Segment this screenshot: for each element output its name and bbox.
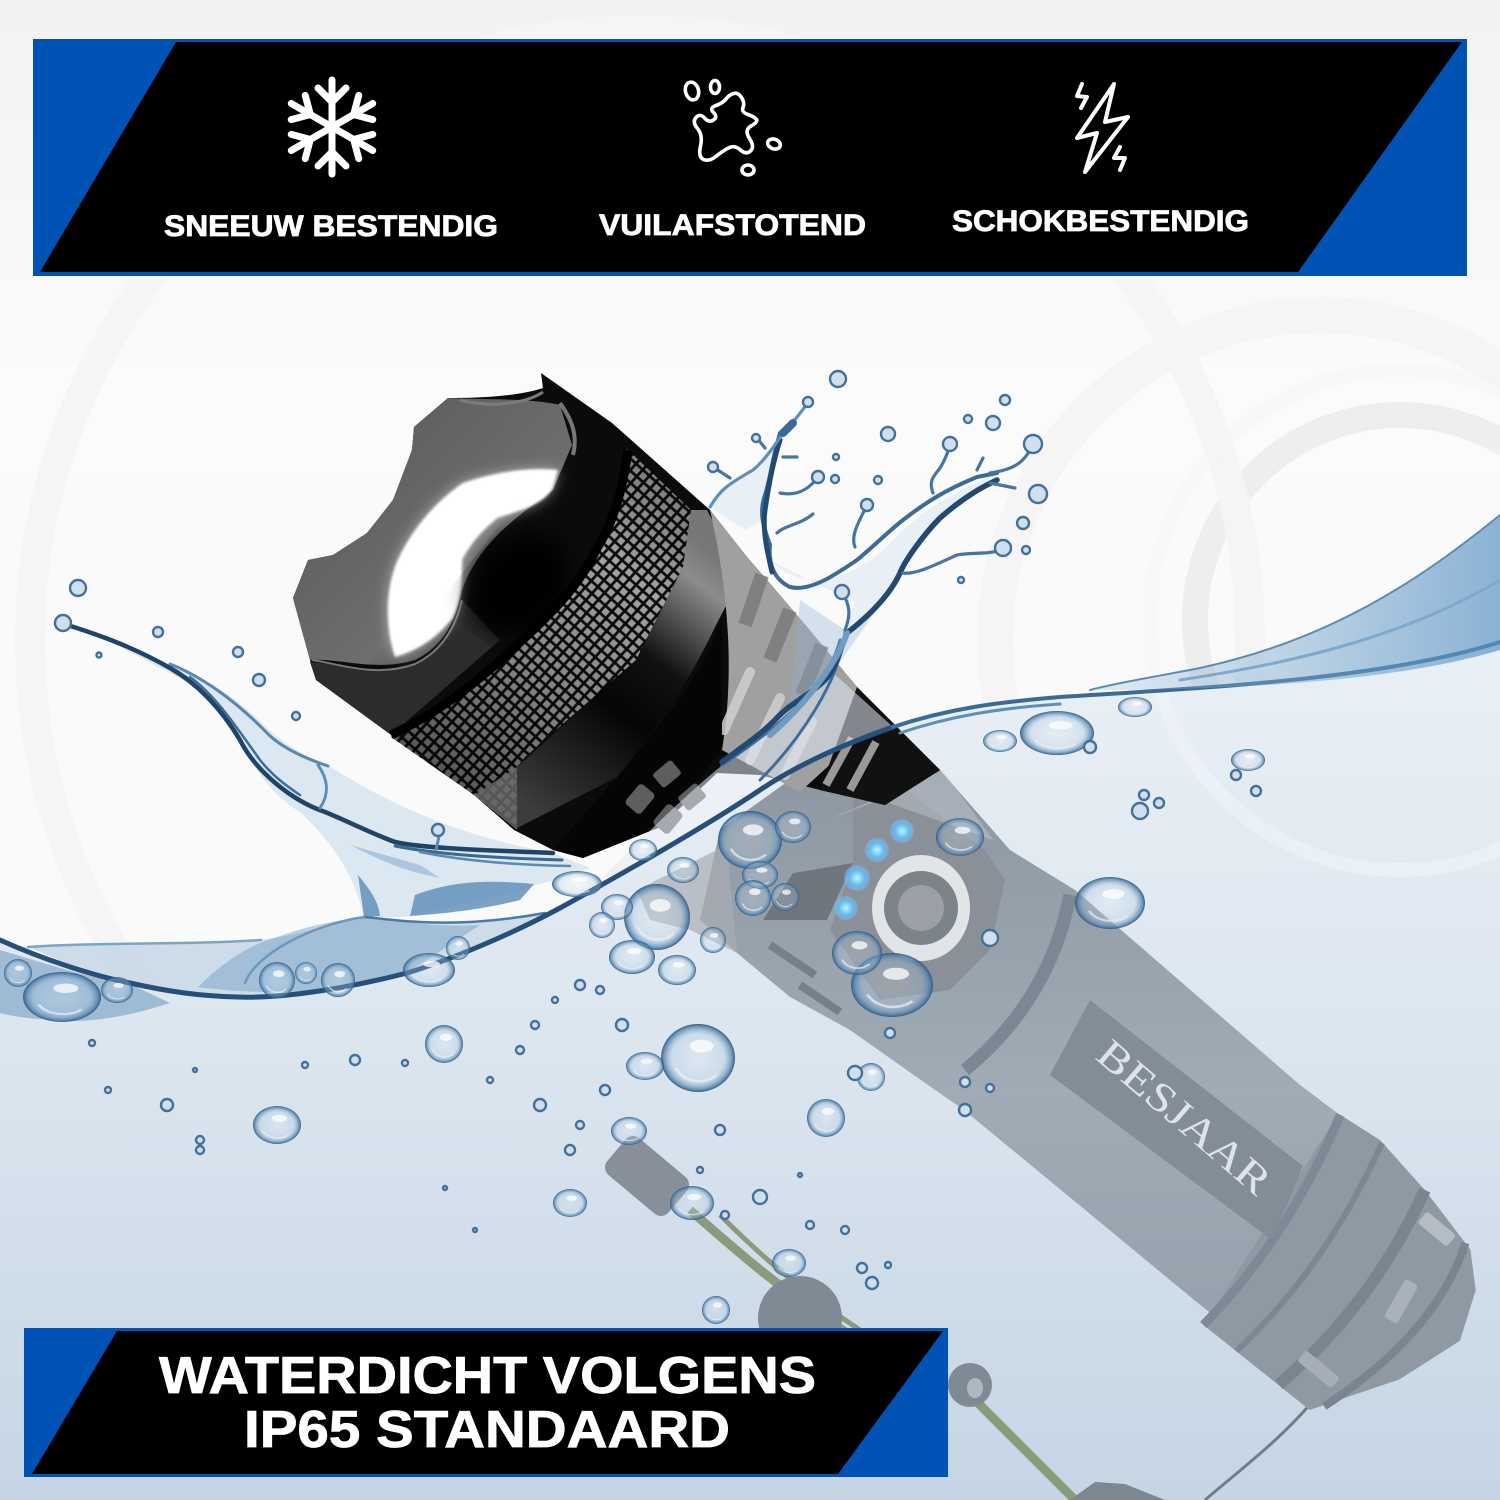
large water bubbles bbox=[4, 697, 1265, 1324]
crown face bbox=[293, 398, 572, 665]
icon: lightning bolt bbox=[1077, 84, 1128, 172]
small water droplets bbox=[55, 371, 1261, 1289]
flashlight lanyard bbox=[601, 1132, 1312, 1500]
heading line 2: IP65 STANDAARD bbox=[244, 1401, 730, 1459]
tail cap bbox=[1180, 1109, 1500, 1457]
flashlight head bbox=[293, 373, 940, 858]
crown top highlight bbox=[460, 392, 543, 404]
icon: mud splash bbox=[683, 80, 782, 175]
smooth band bbox=[517, 510, 729, 828]
knurled grip bbox=[391, 448, 691, 830]
lens light bbox=[388, 469, 558, 657]
flashlight body, submerged bbox=[637, 715, 1500, 1457]
label: schokbestendig: SCHOKBESTENDIG bbox=[952, 205, 1249, 238]
head silhouette bbox=[293, 373, 940, 858]
clamp teeth bbox=[624, 759, 707, 835]
heading line 1: WATERDICHT VOLGENS bbox=[159, 1347, 816, 1405]
label: vuilafstotend: VUILAFSTOTEND bbox=[599, 209, 866, 242]
name plate bbox=[1050, 1000, 1303, 1240]
bottom banner bbox=[24, 1328, 948, 1477]
crown lower shade bbox=[310, 600, 500, 735]
water ribbons and splashes bbox=[0, 402, 1500, 997]
label: sneeuw bestendig: SNEEUW BESTENDIG bbox=[164, 210, 498, 243]
name plate: BESJAAR bbox=[1088, 1030, 1281, 1204]
dark neck with teeth bbox=[820, 687, 940, 805]
front collar band bbox=[965, 895, 1070, 1070]
left splash lobe bbox=[61, 623, 590, 917]
lens glow bbox=[388, 470, 558, 657]
lens dark core bbox=[451, 514, 589, 656]
fin section bbox=[710, 510, 872, 792]
top banner bbox=[33, 39, 1467, 276]
front rim bbox=[391, 450, 628, 735]
control panel bbox=[830, 785, 1005, 1000]
water behind flashlight head bbox=[0, 623, 590, 1021]
black stripe bbox=[553, 620, 722, 858]
icon: snowflake bbox=[284, 80, 380, 174]
